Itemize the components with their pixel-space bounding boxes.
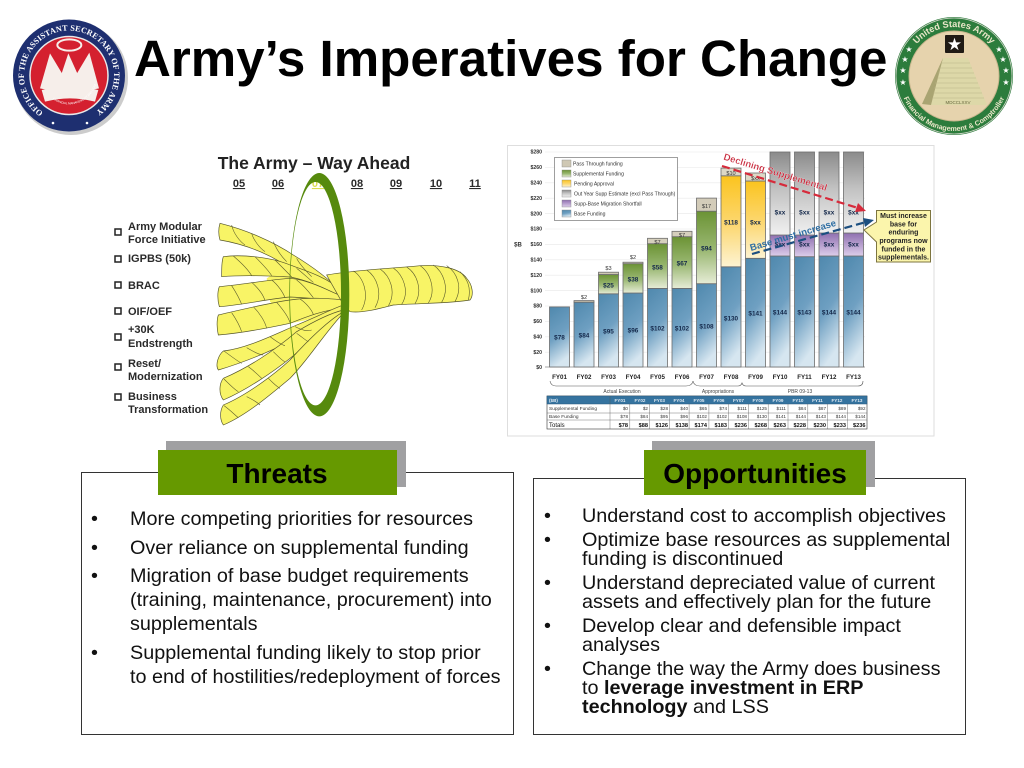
chart legend: Pass Through funding <box>573 162 623 168</box>
funding data table: $138 <box>676 423 688 429</box>
opportunities heading: Opportunities <box>663 458 847 489</box>
bar value labels: $xx <box>751 176 760 182</box>
fiscal year axis labels: FY03 <box>601 374 616 381</box>
bar value labels: $xx <box>750 220 761 226</box>
icon: United States Army Financial Management and Comptroller seal: ★ <box>905 45 913 54</box>
funding data table: Base Funding <box>549 414 579 420</box>
arrow: declining supplemental <box>722 152 866 212</box>
bar value labels: $118 <box>724 220 738 226</box>
bar value labels: $102 <box>675 326 690 332</box>
rope of converging strands <box>217 223 472 425</box>
funding data table: $108 <box>737 414 747 419</box>
funding data table: $87 <box>818 406 826 411</box>
funding data table: $78 <box>620 414 628 419</box>
icon: Office of the Assistant Secretary of the Army seal: OFFICE OF THE ASSISTANT SECRETARY OF THE ARMY <box>18 25 120 116</box>
year labels: 10 <box>430 178 442 190</box>
chart gridlines and y axis: $100 <box>530 288 542 294</box>
chart gridlines and y axis: $B <box>514 242 523 248</box>
callout: must increase base: enduring <box>889 230 918 237</box>
funding data table: $74 <box>719 406 727 411</box>
opportunities bullet list <box>544 505 950 718</box>
year labels: 08 <box>351 178 363 190</box>
fiscal year axis labels: FY12 <box>822 374 837 381</box>
panel: opportunities <box>534 441 966 734</box>
funding data table: $144 <box>796 414 806 419</box>
bar value labels: $2 <box>630 255 636 261</box>
bar value labels: $144 <box>773 310 788 316</box>
highlight ring around 07 <box>289 173 349 416</box>
threats bullet list: • <box>91 565 98 587</box>
arrow: declining supplemental: Declining Supplemental <box>722 152 828 194</box>
threats bullet list: • <box>91 508 98 530</box>
opportunities bullet list: • <box>544 505 551 527</box>
threats bullet list <box>91 508 501 688</box>
icon: United States Army Financial Management and Comptroller seal: MDCCLXXV <box>945 100 971 105</box>
threats bullet list: supplementals <box>130 613 258 635</box>
fiscal year axis labels: FY08 <box>724 374 739 381</box>
funding data table: $92 <box>858 406 866 411</box>
bar value labels: $xx <box>775 242 786 248</box>
opportunities bullet list: Change the way the Army does business <box>582 658 941 680</box>
bar value labels: $xx <box>775 210 786 216</box>
funding data table: FY11 <box>812 398 823 403</box>
fiscal year axis labels: FY06 <box>675 374 690 381</box>
funding data table: FY09 <box>773 398 784 403</box>
threats bullet list: (training, maintenance, procurement) into <box>130 589 492 611</box>
opportunities bullet list: funding is discontinued <box>582 548 783 570</box>
panel: budget bar chart image <box>508 146 934 436</box>
chart legend: Out Year Supp Estimate (excl Pass Through) <box>574 192 676 198</box>
icon: United States Army Financial Management and Comptroller seal: ★ <box>899 66 907 75</box>
chart gridlines and y axis: $120 <box>530 273 542 279</box>
fiscal year axis labels: FY11 <box>797 374 812 381</box>
funding data table: FY13 <box>852 398 863 403</box>
chart legend <box>554 158 678 220</box>
threats bullet list: to end of hostilities/redeployment of forces <box>130 666 501 688</box>
fiscal year axis labels: FY13 <box>846 374 861 381</box>
initiative checklist: Endstrength <box>128 338 193 350</box>
chart legend: Supplemental Funding <box>573 172 624 178</box>
chart gridlines and y axis: $20 <box>533 350 542 356</box>
initiative checklist: Force Initiative <box>128 234 206 246</box>
funding data table: ($B) <box>549 398 558 403</box>
bar value labels <box>554 171 861 342</box>
chart gridlines and y axis: $180 <box>530 227 542 233</box>
chart gridlines and y axis: $220 <box>530 196 542 202</box>
callout: must increase base: programs now <box>879 238 928 245</box>
icon: United States Army Financial Management and Comptroller seal: ★ <box>999 55 1007 64</box>
threats bullet list: Migration of base budget requirements <box>130 565 469 587</box>
chart gridlines and y axis: $280 <box>530 150 542 156</box>
bar value labels: $xx <box>824 210 835 216</box>
threats bullet list: More competing priorities for resources <box>130 508 473 530</box>
bar value labels: $38 <box>628 276 639 284</box>
bar value labels: $94 <box>701 246 712 252</box>
chart legend: Supp-Base Migration Shortfall <box>574 202 642 208</box>
threats bullet list: • <box>91 642 98 664</box>
opportunities bullet list: Develop clear and defensible impact <box>582 615 901 637</box>
funding data table: $95 <box>660 414 668 419</box>
bar value labels: $141 <box>748 310 763 318</box>
bar value labels: $3 <box>605 266 612 272</box>
opportunities bullet list: • <box>544 529 551 551</box>
chart gridlines and y axis: $260 <box>530 165 542 171</box>
funding data table: $28 <box>660 406 668 411</box>
bar value labels: $96 <box>628 328 639 334</box>
funding data table: $89 <box>838 406 846 411</box>
arrow: base must increase: Base must increase <box>749 218 837 254</box>
icon: United States Army Financial Management and Comptroller seal: ★ <box>899 78 907 87</box>
funding data table: FY02 <box>635 398 646 403</box>
bar value labels: $58 <box>652 264 663 272</box>
chart gridlines and y axis: $240 <box>530 180 542 186</box>
fiscal year axis labels: FY05 <box>650 374 665 381</box>
funding data table: $88 <box>639 423 648 429</box>
threats bullet list: • <box>91 537 98 559</box>
bar value labels: $2 <box>581 295 587 301</box>
bar value labels: $7 <box>654 240 661 246</box>
funding data table: $236 <box>735 423 747 429</box>
initiative checklist: Modernization <box>128 371 203 383</box>
threats heading <box>158 441 406 495</box>
icon: United States Army Financial Management and Comptroller seal <box>895 17 1013 135</box>
year labels: 11 <box>469 178 481 190</box>
funding data table: $125 <box>757 406 767 411</box>
opportunities bullet list: assets and effectively plan for the future <box>582 591 931 613</box>
fiscal year axis labels: FY01 <box>552 374 567 381</box>
funding data table: FY03 <box>654 398 665 403</box>
year labels <box>233 178 481 190</box>
funding data table: $174 <box>695 423 708 429</box>
chart gridlines and y axis: $200 <box>530 211 542 217</box>
funding data table: FY06 <box>714 398 725 403</box>
chart gridlines and y axis: $40 <box>533 334 542 340</box>
chart gridlines and y axis: $60 <box>533 319 542 325</box>
funding data table: $233 <box>834 423 846 429</box>
funding data table: FY08 <box>753 398 764 403</box>
diagram heading: The Army – Way Ahead <box>218 153 410 173</box>
year labels: 05 <box>233 178 245 190</box>
opportunities bullet list: • <box>544 572 551 594</box>
bar value labels: $7 <box>679 233 685 239</box>
bar value labels: $xx <box>799 210 810 216</box>
opportunities bullet list: Understand cost to accomplish objectives <box>582 505 946 527</box>
bar value labels: $144 <box>846 310 861 316</box>
chart legend: Pending Approval <box>574 182 614 188</box>
funding data table: Totals <box>549 423 565 429</box>
opportunities bullet list: Understand depreciated value of current <box>582 572 935 594</box>
chart gridlines and y axis: $140 <box>530 258 542 264</box>
icon: United States Army Financial Management and Comptroller seal: ★ <box>1002 78 1010 87</box>
threats heading: Threats <box>226 458 328 489</box>
bar value labels: $xx <box>848 242 859 248</box>
bar value labels: $144 <box>822 310 837 316</box>
chart gridlines and y axis: $80 <box>533 304 542 310</box>
panel: The Army Way Ahead diagram <box>115 153 481 425</box>
funding data table: $78 <box>619 423 628 429</box>
funding data table <box>547 396 867 429</box>
funding data table: $102 <box>717 414 727 419</box>
bar value labels: $102 <box>650 326 665 332</box>
icon: United States Army Financial Management and Comptroller seal: United States Army <box>912 21 995 44</box>
opportunities bullet list: to leverage investment in ERP <box>582 677 863 699</box>
funding data table: $141 <box>776 414 786 419</box>
icon: United States Army Financial Management and Comptroller seal: ★ <box>995 45 1003 54</box>
callout: must increase base: funded in the <box>882 246 926 253</box>
fiscal year axis labels: FY02 <box>577 374 592 381</box>
chart gridlines and y axis <box>514 150 865 371</box>
funding data table: FY01 <box>615 398 626 403</box>
initiative checklist: OIF/OEF <box>128 306 172 318</box>
initiative checklist: +30K <box>128 324 155 336</box>
year labels: 07 <box>312 178 324 190</box>
funding data table: $102 <box>697 414 707 419</box>
funding data table: $84 <box>798 406 806 411</box>
funding data table: Supplemental Funding <box>549 406 597 412</box>
funding data table: $111 <box>737 406 747 411</box>
funding data table: FY04 <box>674 398 685 403</box>
bar value labels: $17 <box>702 204 711 210</box>
funding data table: $143 <box>816 414 826 419</box>
initiative checklist: BRAC <box>128 280 160 292</box>
year labels: 06 <box>272 178 284 190</box>
bar value labels: $130 <box>724 316 739 322</box>
bar value labels: $95 <box>603 328 614 336</box>
bar value labels: $10 <box>726 171 736 177</box>
funding data table: $126 <box>656 423 668 429</box>
funding data table: $0 <box>623 406 628 411</box>
icon: United States Army Financial Management and Comptroller seal: ★ <box>901 55 909 64</box>
funding data table: $96 <box>680 414 688 419</box>
funding data table: $268 <box>755 423 767 429</box>
initiative checklist <box>115 221 208 416</box>
funding data table: FY12 <box>832 398 843 403</box>
callout: must increase base: Must increase <box>880 213 927 220</box>
funding data table: $2 <box>643 406 648 411</box>
initiative checklist: Reset/ <box>128 358 161 370</box>
fiscal year axis labels: FY10 <box>773 374 788 381</box>
period brackets: Appropriations <box>702 389 735 395</box>
fiscal year axis labels: FY09 <box>748 374 763 381</box>
initiative checklist: Army Modular <box>128 221 203 233</box>
bar value labels: $xx <box>799 242 810 248</box>
chart gridlines and y axis: $0 <box>536 365 542 371</box>
bar value labels: $67 <box>677 260 688 268</box>
funding data table: $111 <box>776 406 786 411</box>
funding data table: $263 <box>774 423 786 429</box>
fiscal year axis labels: FY04 <box>626 374 641 381</box>
chart gridlines and y axis: $160 <box>530 242 542 248</box>
callout: must increase base: supplementals. <box>878 255 929 262</box>
funding data table: $84 <box>640 414 648 419</box>
bar value labels: $143 <box>797 310 812 316</box>
funding data table: $183 <box>715 423 727 429</box>
initiative checklist: Transformation <box>128 404 208 416</box>
funding data table: FY07 <box>733 398 744 403</box>
bar value labels: $xx <box>848 210 859 216</box>
funding data table: FY10 <box>793 398 804 403</box>
period brackets: Actual Execution <box>603 389 641 395</box>
funding data table: $144 <box>836 414 846 419</box>
funding data table: $228 <box>794 423 806 429</box>
icon: United States Army Financial Management and Comptroller seal: Financial Management & Comptroller <box>904 96 1004 132</box>
chart legend: Base Funding <box>574 212 606 218</box>
funding data table: $40 <box>680 406 688 411</box>
opportunities bullet list: technology and LSS <box>582 696 769 718</box>
callout: must increase base: base for <box>890 221 917 228</box>
funding data table: $230 <box>814 423 826 429</box>
stacked bars <box>550 152 864 367</box>
initiative checklist: IGPBS (50k) <box>128 253 191 265</box>
icon: United States Army Financial Management and Comptroller seal: ★ <box>947 35 962 55</box>
icon: United States Army Financial Management and Comptroller seal: ★ <box>1002 66 1010 75</box>
bar value labels: $25 <box>603 282 614 290</box>
opportunities heading <box>644 441 875 495</box>
callout: must increase base <box>864 210 930 262</box>
funding data table: $144 <box>855 414 866 419</box>
bar value labels: $108 <box>699 324 714 330</box>
funding data table: $236 <box>853 423 866 429</box>
bar value labels: $84 <box>579 332 590 340</box>
funding data table: FY05 <box>694 398 705 403</box>
period brackets <box>550 381 863 395</box>
year labels: 09 <box>390 178 402 190</box>
opportunities bullet list: analyses <box>582 634 660 656</box>
opportunities bullet list: Optimize base resources as supplemental <box>582 529 950 551</box>
funding data table: $130 <box>757 414 767 419</box>
initiative checklist: Business <box>128 391 177 403</box>
threats bullet list: Supplemental funding likely to stop prior <box>130 642 481 664</box>
bar value labels: $78 <box>554 334 565 342</box>
opportunities bullet list: • <box>544 615 551 637</box>
period brackets: PBR 09-13 <box>788 389 812 395</box>
bar value labels: $xx <box>824 242 835 248</box>
panel: threats <box>82 441 514 734</box>
title: Army’s Imperatives for Change <box>134 30 887 87</box>
fiscal year axis labels <box>552 374 861 381</box>
opportunities bullet list: • <box>544 658 551 680</box>
threats bullet list: Over reliance on supplemental funding <box>130 537 469 559</box>
fiscal year axis labels: FY07 <box>699 374 714 381</box>
funding data table: $65 <box>699 406 707 411</box>
